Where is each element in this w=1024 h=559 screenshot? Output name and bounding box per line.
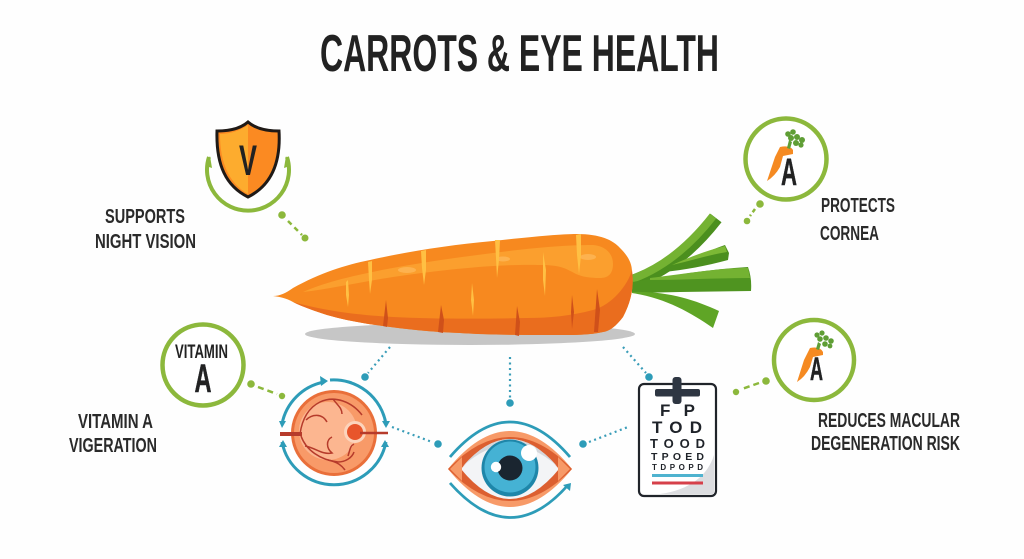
stem: centre highlight [650,268,750,280]
stem: second highlight [672,246,727,265]
icon: eye chart: TDPOPD [652,463,703,472]
label: vitamin A vigeration [69,411,157,457]
carrot shaded underside [293,270,633,335]
label: reduces macular degeneration risk: DEGENERATION RISK [811,433,960,455]
label: supports night vision: SUPPORTS [105,206,185,228]
icon: vitamin V shield: V [239,137,257,185]
icon: retina [279,376,390,485]
connector: cornea badge to carrot [744,200,764,224]
carrot body [273,234,633,335]
connector: vitamin A to retina [247,380,285,399]
icon: eye chart: TOOD [650,436,705,451]
stem: centre [632,267,751,293]
connector: dotted blue lines [361,347,653,448]
stem: lower [632,292,719,328]
icon: vitamin A badge: VITAMIN [175,342,228,363]
label: protects cornea: CORNEA [820,223,879,245]
label: vitamin A vigeration: VIGERATION [69,435,157,457]
stem: second [660,245,729,272]
icon: vitamin A badge [162,324,244,406]
label: reduces macular degeneration risk: REDUCES MACULAR [818,410,960,432]
icon: eye chart: TOD [652,418,702,437]
label: reduces macular degeneration risk [811,410,960,455]
icon: vitamin A badge: A [194,357,212,401]
connector: shield to carrot [278,211,308,242]
connector: macular badge to chart [733,377,770,395]
icon: macular risk carrot badge: A [810,351,823,387]
label: protects cornea: PROTECTS [821,195,895,217]
label: protects cornea [820,195,895,245]
icon: macular risk carrot badge [774,320,854,400]
label: supports night vision [95,206,196,253]
carrot illustration [273,216,751,345]
title: CARROTS & EYE HEALTH [320,25,719,83]
icon: vitamin V shield [206,122,290,211]
icon: eye chart: TPOED [651,451,704,463]
label: vitamin A vigeration: VITAMIN A [78,411,153,433]
icon: protects cornea carrot badge [746,118,826,200]
stem: upper [632,216,716,282]
label: supports night vision: NIGHT VISION [95,231,196,253]
icon: eye [448,422,572,518]
carrot highlight [303,245,613,292]
light stripes [346,234,581,316]
dark stripes [383,289,600,336]
icon: protects cornea carrot badge: A [781,152,797,194]
icon: eye chart [639,377,716,496]
icon: eye chart: FP [660,401,695,420]
